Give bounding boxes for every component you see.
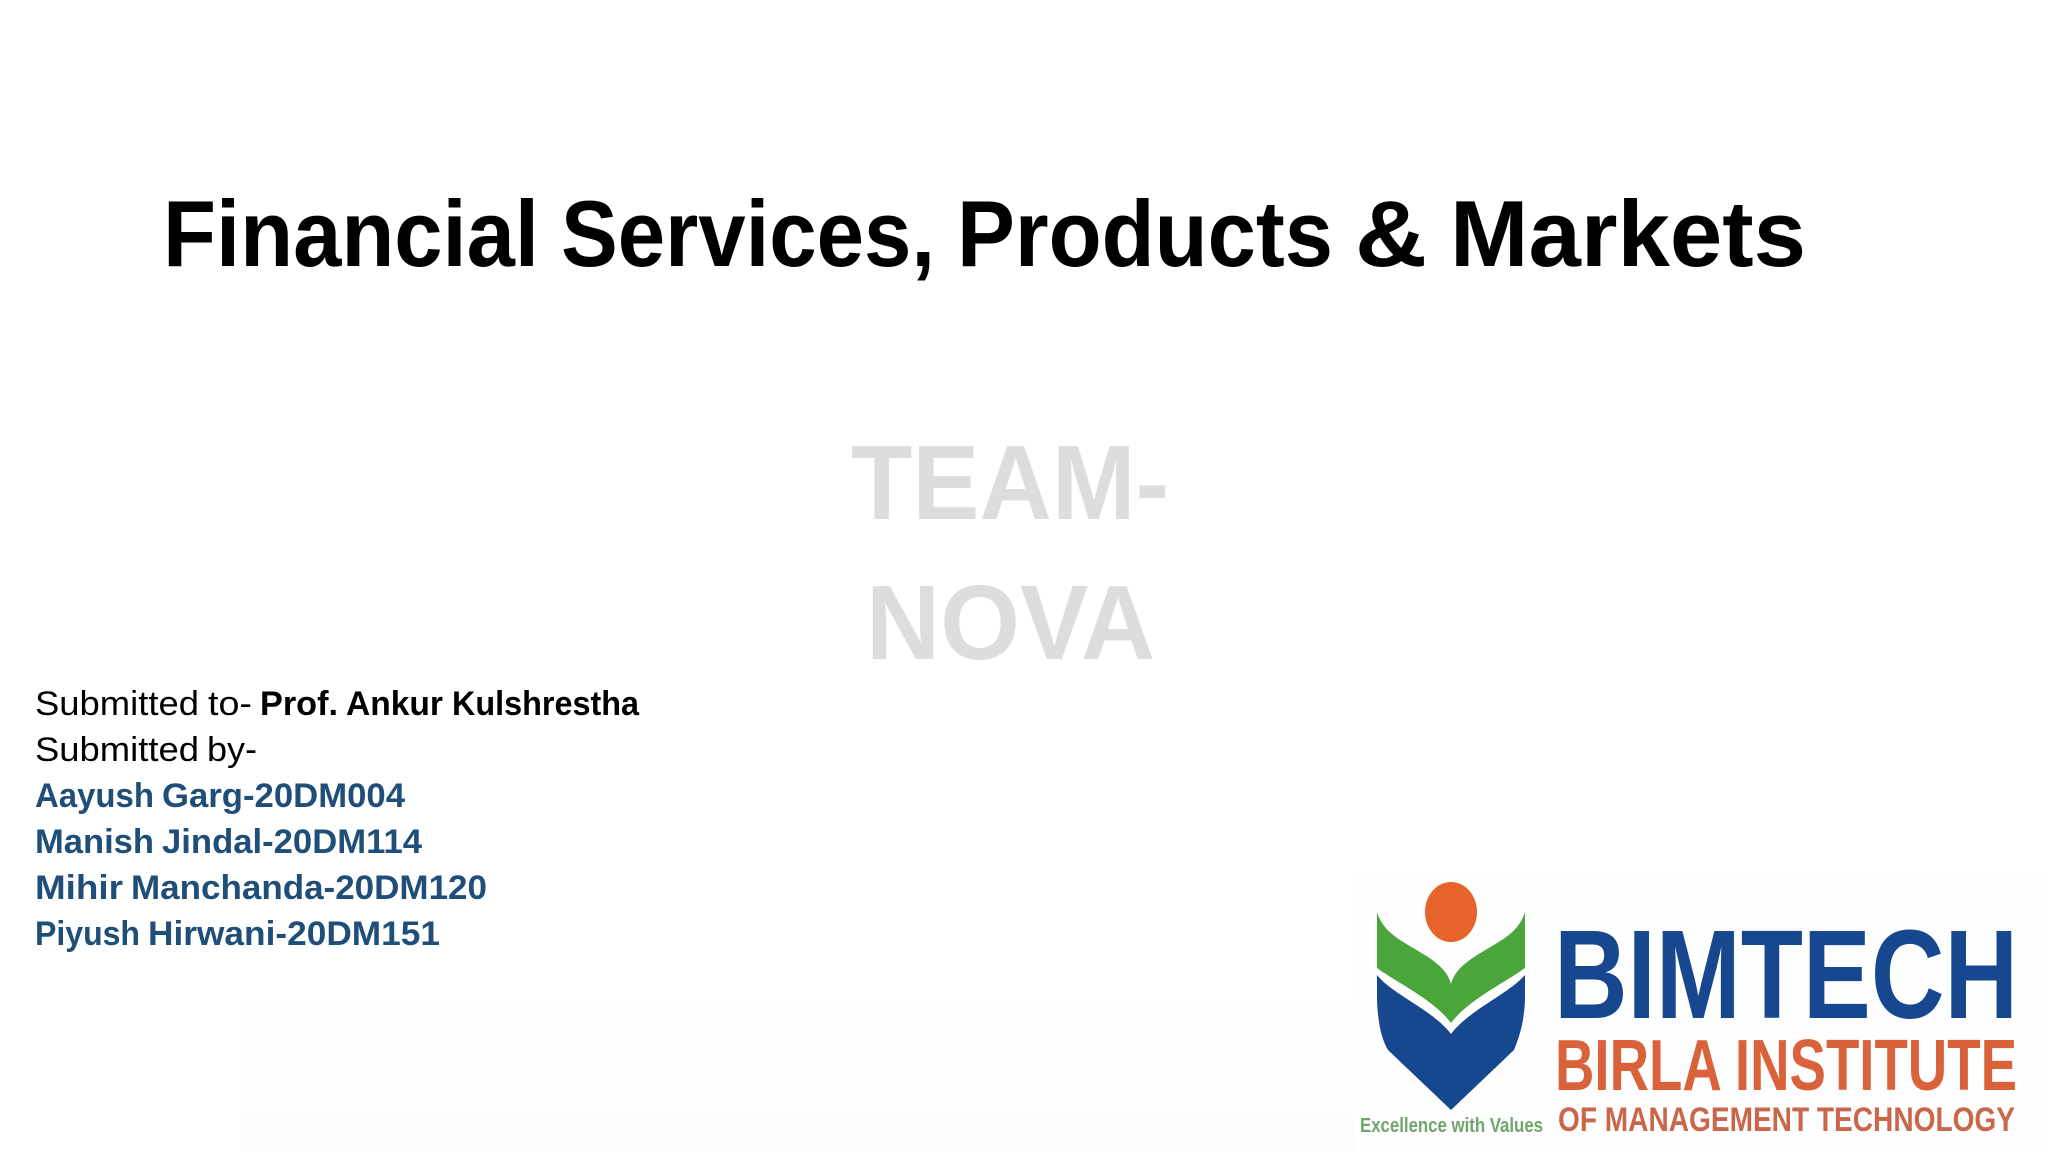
submitted by <box>35 731 257 769</box>
submitted by: Submitted <box>35 731 199 769</box>
submitted to: Submitted <box>35 685 199 723</box>
team members: Hirwani-20DM151 <box>148 915 440 953</box>
submitted by: by- <box>207 731 257 769</box>
title <box>163 181 1806 286</box>
title: Financial <box>163 181 539 286</box>
team members: Garg-20DM004 <box>162 777 405 815</box>
team members: Piyush <box>35 915 140 953</box>
title: Markets <box>1450 181 1806 286</box>
logo: BIMTECH <box>1355 875 2048 1152</box>
team members: Aayush <box>35 777 154 815</box>
team members: Manchanda-20DM120 <box>131 869 487 907</box>
submitted to: to- <box>208 685 252 723</box>
logo emblem <box>1377 882 1525 1110</box>
title: Products <box>957 181 1333 286</box>
title: & <box>1355 181 1427 286</box>
logo tagline: Excellence with Values <box>1360 1115 1543 1137</box>
team members: Mihir <box>35 869 123 907</box>
submitted to: Kulshrestha <box>452 685 640 723</box>
team members <box>35 777 487 953</box>
team members: Jindal-20DM114 <box>162 823 422 861</box>
submitted to: Prof. <box>260 685 338 723</box>
submitted to <box>35 685 640 723</box>
team name: TEAM- <box>851 424 1169 542</box>
team members: Manish <box>35 823 154 861</box>
submission details <box>35 685 640 953</box>
submitted to: Ankur <box>346 685 443 723</box>
team name: NOVA <box>866 564 1155 682</box>
team name <box>851 424 1169 682</box>
title: Services, <box>561 181 935 286</box>
